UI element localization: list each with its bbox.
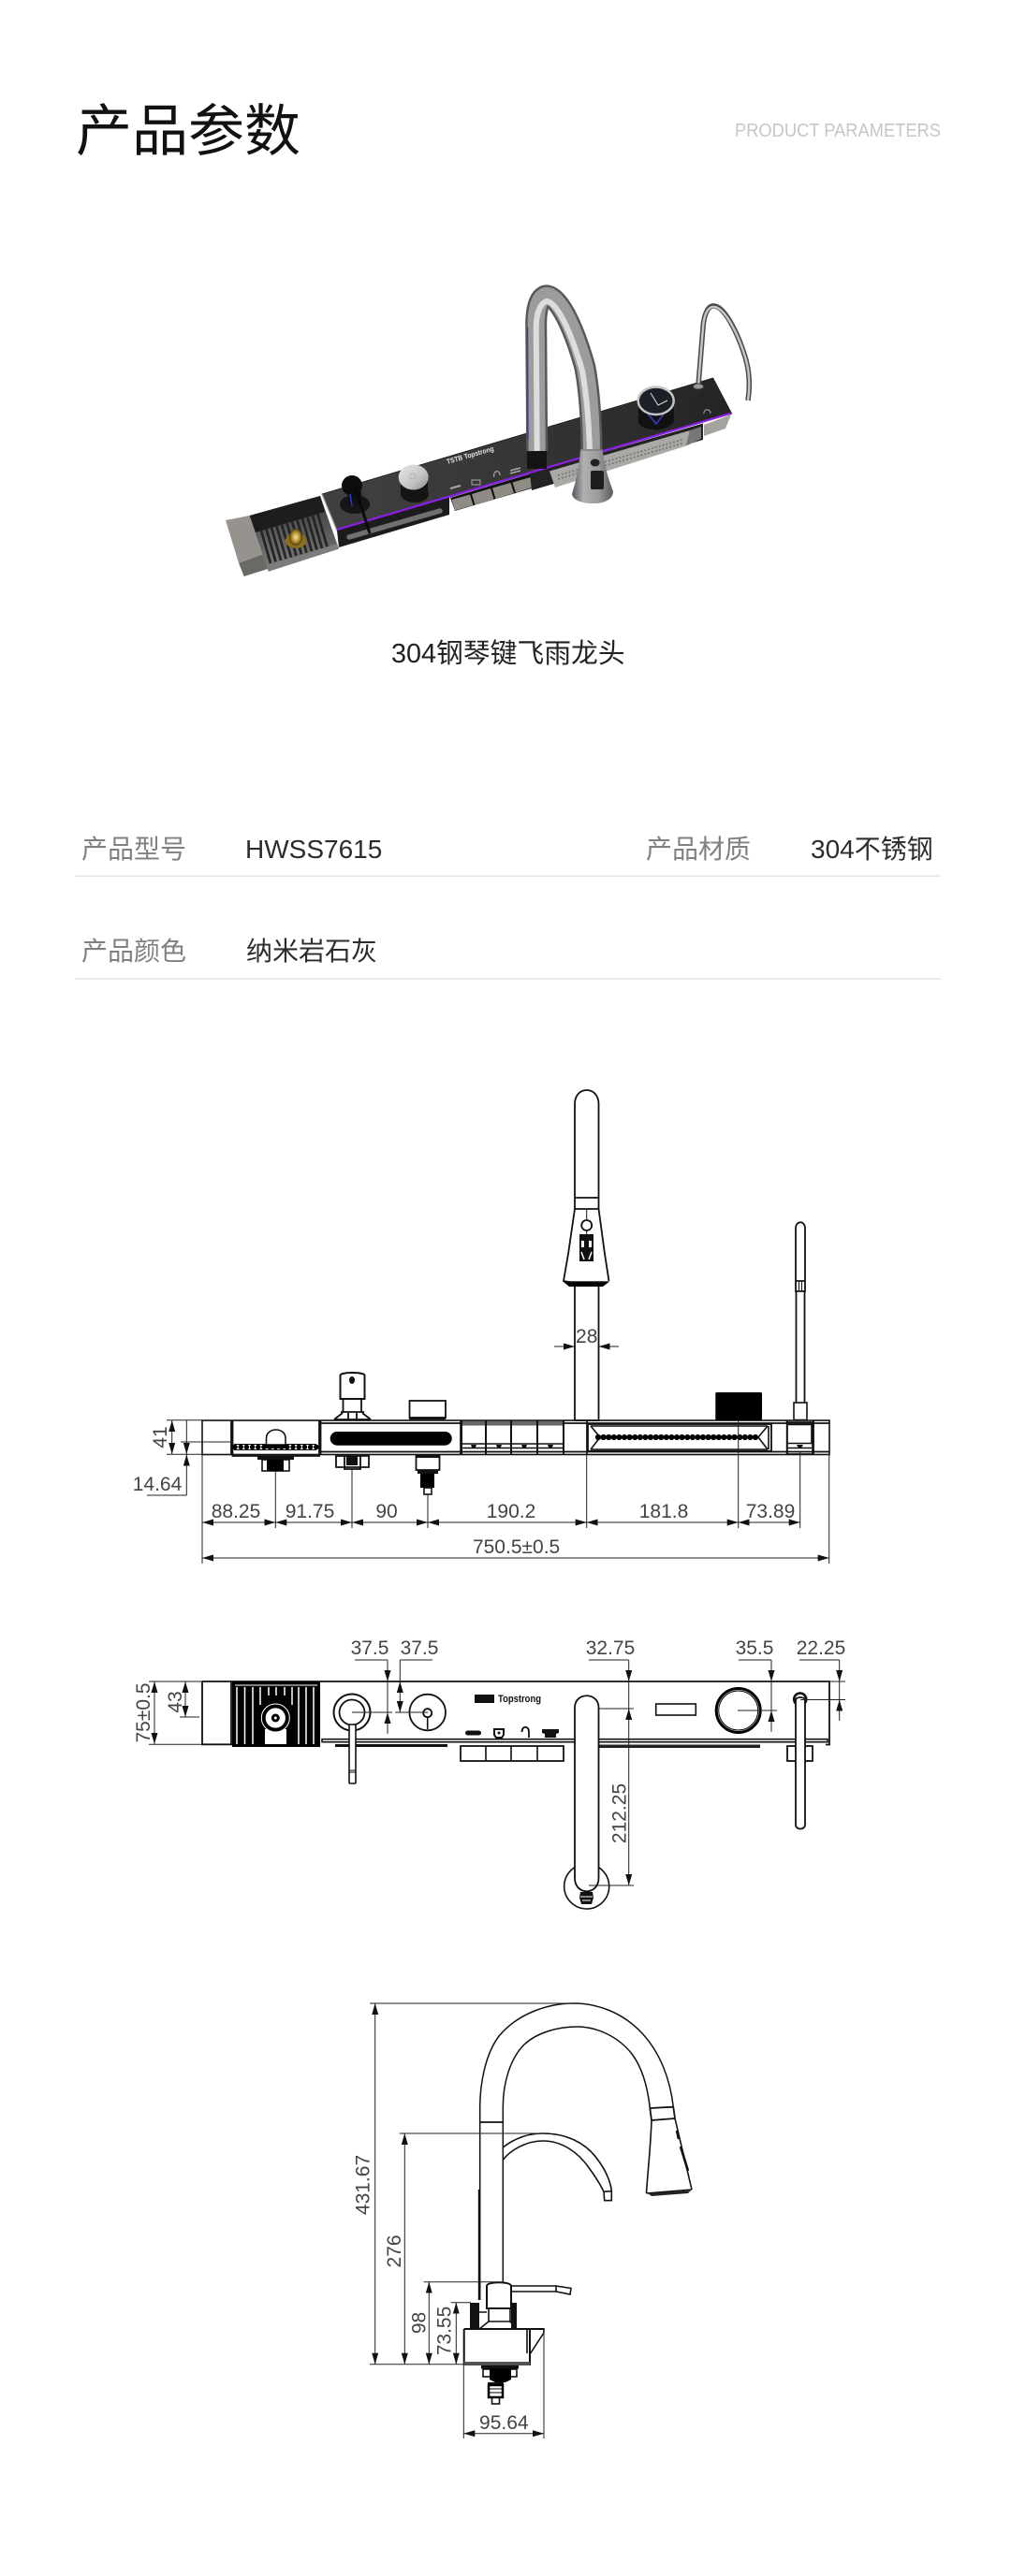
panel function icons [450,410,711,488]
title: 产品参数 [76,100,300,163]
dimension: 73.55 [434,2303,471,2365]
dimension row: hole spacings: 190.2 [487,1501,535,1522]
dimension: 37.5 right: 37.5 [401,1637,438,1659]
dimension: 212.25: 212.25 [608,1783,631,1843]
dimension: overall width: 750.5±0.5 [473,1536,560,1558]
dimension: 37.5 left [351,1637,392,1734]
soap slot [330,1432,452,1446]
spec: material [646,835,933,864]
four keys [461,1420,564,1454]
product photo: faucet render [226,296,749,576]
main arched spout [527,296,592,469]
right end housing [704,415,731,436]
front strip and soap slot [337,498,449,547]
dial plan [716,1688,760,1733]
pull-out spout with head [564,1090,608,1420]
spec: model: 产品型号 [81,835,186,864]
dimension: 35.5: 35.5 [736,1637,773,1659]
dimension row: hole spacings [202,1420,829,1564]
spec: colour: 纳米岩石灰 [246,937,377,966]
brand mark [475,1694,541,1705]
mounting box [464,2329,544,2365]
spec: material: 304不锈钢 [811,835,933,864]
dimension row: hole spacings: 73.89 [746,1501,795,1522]
piano key buttons [450,473,541,511]
four key plan [461,1746,564,1761]
dimension: 41 [150,1420,202,1454]
dimension: 22.25: 22.25 [797,1637,845,1659]
dimension: 14.64 [133,1420,233,1495]
dimension: 28 [554,1326,619,1347]
dimension: 276: 276 [384,2234,405,2268]
brand mark: Topstrong [498,1694,541,1705]
dimension: 431.67: 431.67 [352,2155,374,2215]
dimension: 95.64 [463,2331,544,2438]
dimension: 95.64: 95.64 [479,2412,529,2434]
brand mark on panel: TSTB Topstrong [446,444,495,466]
purple light strip [337,414,731,530]
dispenser plan [333,1694,371,1783]
dimension: 37.5 right [395,1637,438,1712]
ribbed drain tray [250,496,339,572]
spec: material: 产品材质 [646,835,751,864]
spec table [75,835,941,980]
dimension: 28: 28 [576,1326,597,1347]
spec: model: HWSS7615 [245,835,382,864]
bar body [202,1420,829,1456]
dimension: 43 [165,1681,199,1717]
spec: colour [81,937,377,966]
end key [787,1422,813,1454]
black dial block [715,1392,762,1420]
dimension: 98 [408,2282,498,2365]
knob plan [409,1695,446,1730]
front elevation drawing [133,1090,829,1564]
display rectangle [656,1704,696,1715]
function icons [465,1727,559,1738]
soap dispenser [340,475,370,533]
subtitle: product parameters: PRODUCT PARAMETERS [735,121,941,141]
dimension: 22.25 [797,1637,845,1721]
spec: model [81,835,382,864]
under-deck fitting [481,2365,519,2404]
rod spout plan [794,1694,806,1828]
black glass panel [322,378,732,531]
dimension: 32.75: 32.75 [586,1637,635,1659]
gooseneck spout [479,2003,675,2300]
side elevation drawing [352,2003,692,2438]
dimension row: hole spacings: 181.8 [639,1501,688,1522]
dimension: 75±0.5 [133,1681,202,1744]
bar outline [202,1681,829,1748]
dimension: 41: 41 [150,1426,171,1448]
icon: gold drain knob [285,529,307,548]
temperature dial [638,387,674,429]
ribbed tray plan [232,1681,320,1747]
dimension row: hole spacings: 90 [375,1501,398,1522]
metal knob [399,464,429,502]
steel end block [226,516,268,576]
dimension: 35.5 [736,1637,777,1732]
dimension: 431.67 [352,2003,574,2365]
dimension: 43: 43 [165,1691,186,1713]
secondary spout [503,2133,611,2201]
dimension: 73.55: 73.55 [434,2307,455,2355]
dimension row: hole spacings: 88.25 [212,1501,260,1522]
soap dispenser elevation [334,1373,371,1469]
spray head side [646,2118,692,2196]
dimension: 14.64: 14.64 [133,1474,183,1495]
slatted front plate [530,423,703,490]
top view drawing [133,1637,845,1909]
caption: product name: 304钢琴键飞雨龙头 [391,639,625,669]
knob elevation [409,1401,446,1494]
slatted outlet [588,1424,771,1451]
drain fitting [234,1430,316,1471]
end key plan [787,1746,813,1761]
dimension: 32.75 [586,1637,635,1885]
side lever and body [470,2282,571,2329]
spec: colour: 产品颜色 [81,937,186,966]
thin rod spout [794,1222,807,1420]
dimension: 75±0.5: 75±0.5 [133,1682,154,1743]
main spout plan [564,1696,609,1909]
pull-down spray head [572,449,613,503]
dimension row: hole spacings: 91.75 [286,1501,334,1522]
dimension: 98: 98 [408,2312,431,2334]
dimension: 37.5 left: 37.5 [351,1637,388,1659]
small arched spout [693,306,749,400]
